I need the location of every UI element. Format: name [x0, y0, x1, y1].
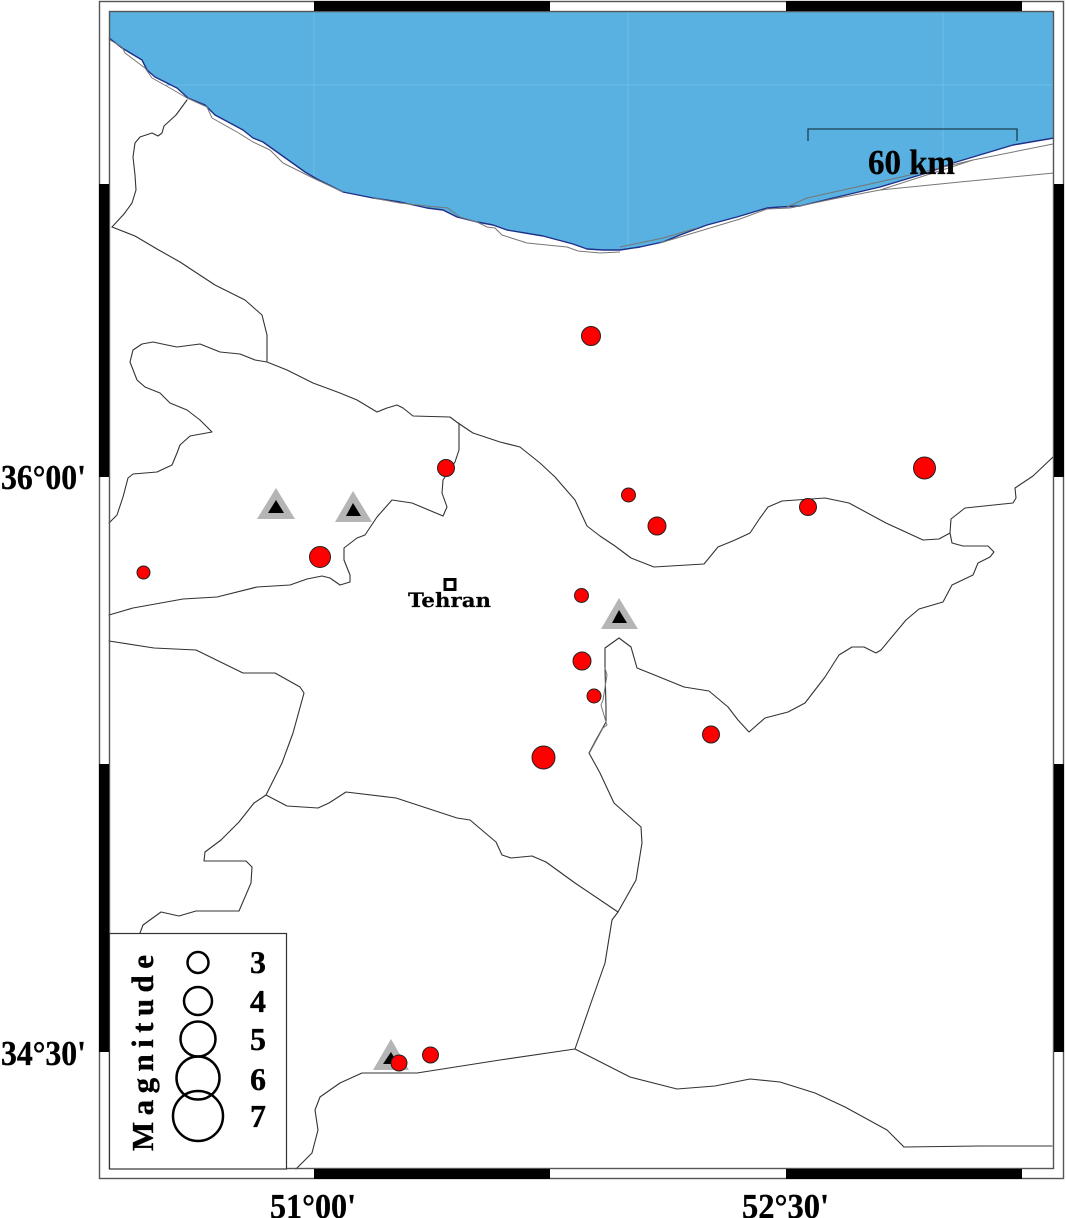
legend values: [250, 944, 266, 1134]
legend values: 7: [250, 1098, 266, 1134]
legend values: 6: [250, 1061, 266, 1097]
axis label: 36°00': 36°00': [1, 458, 86, 497]
legend values: 3: [250, 944, 266, 980]
station triangles: [257, 488, 638, 1070]
shoreline: secondary coast outline: [110, 40, 1054, 253]
legend title: Magnitude: [125, 955, 160, 1151]
scale bar: 60 km: 60 km: [868, 143, 955, 182]
sea: Caspian: [109, 11, 1054, 250]
city marker: Tehran: [408, 580, 491, 612]
axis label: 34°30': 34°30': [1, 1034, 86, 1073]
legend values: 5: [250, 1021, 266, 1057]
earthquake epicentres: [137, 326, 936, 1071]
provincial borders: [109, 100, 1053, 1169]
city marker: Tehran: Tehran: [408, 588, 491, 612]
legend: magnitude: [110, 934, 286, 1169]
scale bar: 60 km: [808, 129, 1017, 182]
legend values: 4: [250, 983, 266, 1019]
legend circles: [173, 952, 223, 1141]
